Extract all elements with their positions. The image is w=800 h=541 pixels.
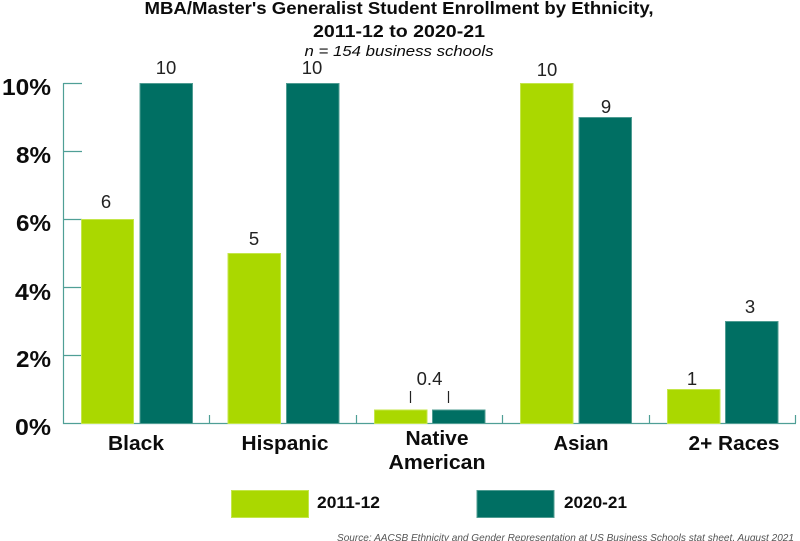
y axis labels: 2%: [16, 346, 51, 372]
category labels: Hispanic: [242, 433, 328, 455]
category labels: [108, 428, 780, 474]
y axis labels: 8%: [16, 142, 51, 168]
bars: Asian: 9: [601, 96, 611, 117]
category labels: Black: [108, 433, 165, 455]
legend: [232, 490, 627, 518]
category labels: 2+ Races: [688, 433, 780, 455]
bars: Black: [82, 57, 192, 424]
bars: 2+ Races: 3: [745, 296, 755, 317]
y axis labels: 6%: [16, 210, 51, 236]
bars: Hispanic: 5: [249, 228, 259, 249]
title: [144, 0, 654, 41]
bars: Black: 10: [156, 57, 176, 78]
y axis labels: 4%: [15, 279, 51, 305]
bars: Native American: [374, 368, 485, 424]
subtitle: n = 154 business schools: [304, 43, 494, 60]
category labels: American: [388, 452, 486, 474]
y axis labels: [2, 74, 51, 440]
category labels: Asian: [554, 433, 608, 455]
bars: 2+ Races: [668, 296, 778, 424]
axes and ticks: [64, 83, 796, 424]
title: 2011-12 to 2020-21: [313, 21, 485, 41]
legend: 2020-21: [564, 494, 627, 512]
bars: Native American: 0.4: [417, 368, 442, 389]
category labels: Native: [406, 428, 468, 450]
bars: Hispanic: [228, 57, 339, 424]
bars: Asian: 10: [537, 59, 557, 80]
bars: Black: 6: [101, 191, 111, 212]
bars: 2+ Races: 1: [687, 368, 697, 389]
y axis labels: 0%: [15, 414, 51, 440]
legend: 2011-12: [317, 494, 380, 512]
bars: Hispanic: 10: [302, 57, 322, 78]
bars: Asian: [520, 59, 632, 424]
y axis labels: 10%: [2, 74, 51, 100]
